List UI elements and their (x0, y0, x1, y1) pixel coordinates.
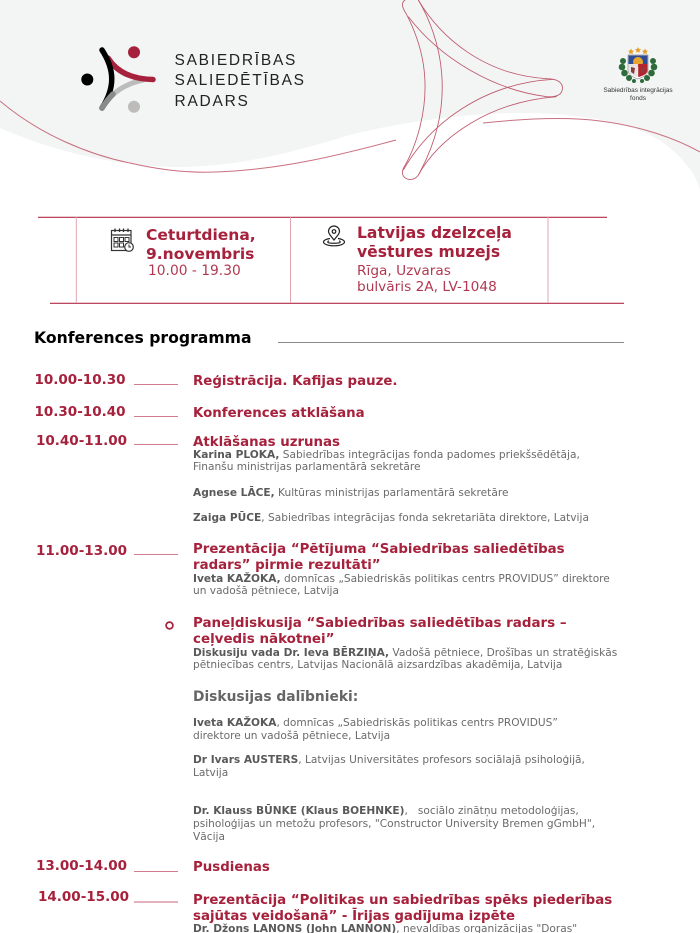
venue name (357, 224, 512, 261)
title: Konferences atklāšana (193, 406, 365, 420)
venue address: Rīga, Uzvaras (357, 262, 451, 278)
moderator: pētniecības centrs, Latvijas Nacionālā aizsardzības akadēmija, Latvija (193, 659, 562, 671)
date: Ceturtdiena, (146, 226, 256, 244)
programme item 10.00-10.30 (34, 372, 397, 388)
Sabiedrības integrācijas fonds emblem (603, 47, 673, 102)
participant: Austers (193, 754, 585, 779)
emblem caption: fonds (630, 95, 646, 102)
logo wordmark: RADARS (174, 93, 250, 110)
time: 10.30-10.40 (34, 404, 126, 420)
title: Paneļdiskusija “Sabiedrības saliedētības radars – (193, 616, 567, 630)
programme item 14.00-15.00 (38, 889, 612, 933)
programme item 10.40-11.00 (36, 433, 589, 524)
speaker: Kažoka: Iveta KAŽOKA, domnīcas „Sabiedriskās politikas centrs PROVIDUS” direktore (193, 572, 610, 584)
icon: location pin (322, 225, 346, 246)
participants heading: Diskusijas dalībnieki: (193, 689, 358, 705)
speaker: Kažoka: un vadošā pētniece, Latvija (193, 585, 339, 597)
connector (134, 416, 178, 417)
venue address (357, 262, 497, 294)
participant: Bünke: Dr. Klauss BŪNKE (Klaus BOEHNKE), sociālo zinātņu metodoloģijas, (193, 805, 579, 817)
participant: Austers: Latvija (193, 767, 228, 779)
logo wordmark (174, 52, 306, 110)
date (146, 226, 256, 263)
section heading: programme: Konferences programma (34, 328, 252, 347)
logo wordmark: SALIEDĒTĪBAS (174, 72, 306, 89)
event details table (38, 216, 624, 304)
speaker: Ploka (193, 448, 580, 473)
icon: coat of arms (618, 47, 658, 83)
programme item 11.00-13.00 (36, 542, 610, 597)
time: 13.00-14.00 (36, 858, 127, 874)
header background with decorative curves (0, 0, 700, 189)
venue name: vēstures muzejs (357, 243, 500, 261)
title: Atklāšanas uzrunas (193, 434, 340, 450)
speaker: Lāce: Agnese LĀCE, Kultūras ministrijas parlamentārā sekretāre (193, 487, 508, 499)
logo: Sabiedrības saliedētības radars (81, 46, 306, 113)
date: 9.novembris (146, 245, 254, 263)
moderator: Diskusiju vada Dr. Ieva BĒRZIŅA, Vadošā pētniece, Drošības un stratēģiskās (193, 646, 617, 658)
title (193, 892, 612, 924)
logo wordmark: SABIEDRĪBAS (174, 52, 297, 68)
programme item: panel discussion (165, 616, 617, 843)
title: Pusdienas (193, 860, 270, 874)
participant: Bünke: psiholoģijas un metožu profesors, "Constructor University Bremen gGmbH", (193, 818, 595, 830)
table rules (38, 216, 624, 304)
time: 10.00-10.30 (34, 372, 126, 388)
title: radars” pirmie rezultāti” (193, 558, 381, 573)
moderator (193, 646, 617, 671)
programme item 13.00-14.00 (36, 858, 270, 874)
bullet (165, 621, 174, 630)
participant: Bünke: Vācija (193, 831, 225, 843)
icon: calendar with clock (110, 228, 134, 252)
speaker: Pūce: Zaiga PŪCE, Sabiedrības integrācijas fonda sekretariāta direktore, Latvija (193, 512, 589, 524)
participant: Kažoka (193, 716, 558, 742)
speaker: Ploka: Finanšu ministrijas parlamentārā sekretāre (193, 461, 421, 473)
venue address: bulvāris 2A, LV-1048 (357, 278, 497, 294)
participant: Bünke (193, 804, 595, 843)
title: Reģistrācija. Kafijas pauze. (193, 374, 397, 388)
title: Prezentācija “Politikas un sabiedrības spēks piederības (193, 892, 612, 908)
logo mark (81, 46, 156, 113)
participant: Austers: Dr Ivars AUSTERS, Latvijas Universitātes profesors sociālajā psiholoģijā, (193, 754, 585, 766)
connector (134, 554, 178, 555)
title (193, 542, 565, 573)
connector (134, 384, 178, 385)
heading rule (278, 342, 624, 343)
emblem caption: Sabiedrības integrācijas (603, 87, 673, 94)
time: 14.00-15.00 (38, 889, 129, 905)
programme item 10.30-10.40 (34, 404, 365, 420)
connector (134, 901, 178, 903)
connector (134, 871, 178, 872)
speaker: Ploka: Karina PLOKA, Sabiedrības integrācijas fonda padomes priekšsēdētāja, (193, 448, 580, 460)
time: 11.00-13.00 (36, 542, 127, 558)
venue name: Latvijas dzelzceļa (357, 224, 512, 242)
speaker: Kažoka (193, 572, 610, 597)
participant: Kažoka: Iveta KAŽOKA, domnīcas „Sabiedriskās politikas centrs PROVIDUS” (193, 717, 558, 729)
title: ceļvedis nākotnei” (193, 632, 334, 647)
participant: Kažoka: direktore un vadošā pētniece, Latvija (193, 730, 390, 742)
title (193, 616, 567, 647)
time: 10.40-11.00 (36, 433, 127, 449)
time: 10.00 - 19.30 (148, 263, 241, 279)
emblem caption (603, 87, 673, 102)
connector (134, 444, 178, 445)
title: sajūtas veidošanā” - Īrijas gadījuma izpēte (193, 909, 515, 924)
title: Prezentācija “Pētījuma “Sabiedrības saliedētības (193, 542, 565, 557)
